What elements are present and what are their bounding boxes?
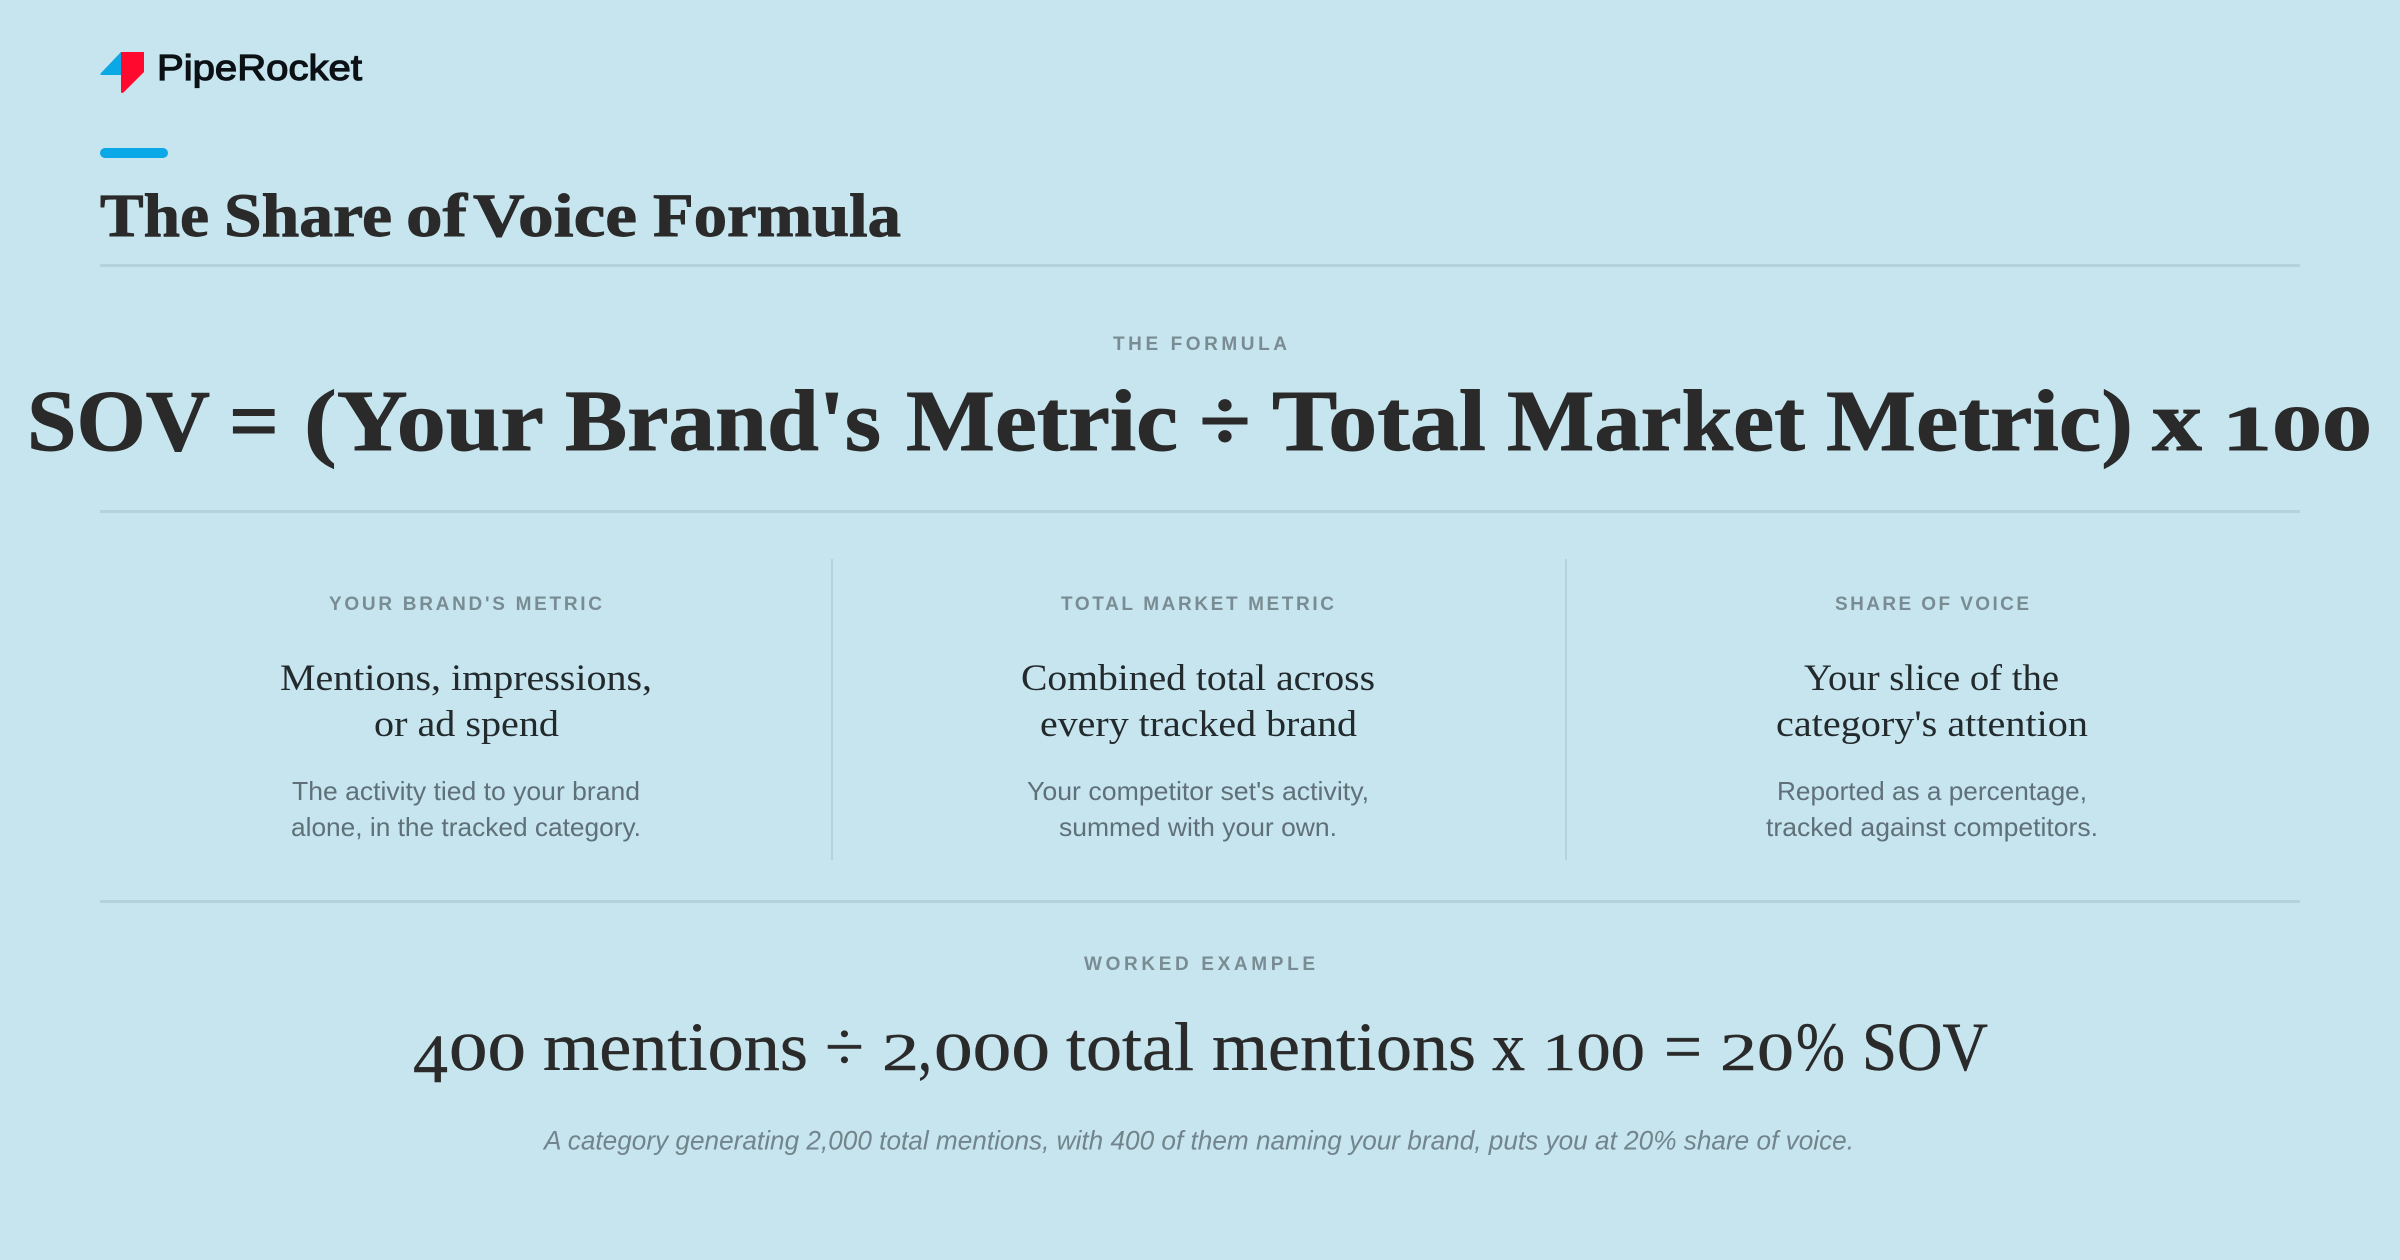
column description <box>1766 776 2098 842</box>
column heading <box>1776 658 2088 745</box>
column description: alone, in the tracked category. <box>291 812 641 842</box>
title: of <box>406 183 468 250</box>
formula label: THE FORMULA <box>1113 334 1287 355</box>
title: Share <box>224 183 392 250</box>
panel: worked example <box>413 954 1988 1156</box>
column label: YOUR BRAND'S METRIC <box>329 594 602 615</box>
worked example equation: SOV <box>1862 1009 1988 1085</box>
title: Formula <box>653 183 901 250</box>
worked example equation: , <box>918 1009 932 1085</box>
worked example equation: 000 <box>934 1024 1050 1082</box>
column description: tracked against competitors. <box>1766 812 2098 842</box>
column label: SHARE OF VOICE <box>1835 594 2029 615</box>
column heading: or ad spend <box>374 704 560 745</box>
logo: PipeRocket <box>100 47 362 93</box>
worked example equation <box>413 1009 1988 1097</box>
formula equation: SOV <box>27 372 210 469</box>
column heading: every tracked brand <box>1040 704 1358 745</box>
worked example label: WORKED EXAMPLE <box>1084 954 1315 975</box>
formula equation: x <box>2152 372 2203 469</box>
column heading <box>280 658 652 745</box>
column label: TOTAL MARKET METRIC <box>1061 594 1334 615</box>
formula equation: ÷ <box>1199 372 1251 469</box>
logo wordmark: PipeRocket <box>157 47 362 88</box>
panel: total market metric <box>1021 594 1375 842</box>
panel: the formula <box>27 334 2372 469</box>
panel: your brand's metric <box>280 594 652 842</box>
worked example equation: 20 <box>1720 1024 1794 1082</box>
column description: Reported as a percentage, <box>1777 776 2087 806</box>
worked example equation: % <box>1796 1009 1845 1085</box>
worked example equation: x <box>1492 1009 1525 1085</box>
formula equation: Market <box>1507 372 1805 469</box>
column heading: Combined total across <box>1021 658 1375 699</box>
column heading <box>1021 658 1375 745</box>
column heading: Your slice of the <box>1804 658 2059 699</box>
worked example equation: mentions <box>1212 1009 1476 1085</box>
worked example equation: 4 <box>413 1021 448 1097</box>
icon: logo mark <box>100 52 144 93</box>
title: The <box>100 183 209 250</box>
formula equation: Total <box>1272 372 1486 469</box>
formula equation: Metric) <box>1826 372 2133 469</box>
formula equation: Metric <box>906 372 1178 469</box>
worked example note: A category generating 2,000 total mentions, with 400 of them naming your brand, puts you at 20% share of voice. <box>542 1126 1854 1156</box>
worked example equation: ÷ <box>825 1009 864 1085</box>
column description <box>291 776 641 842</box>
worked example equation: 00 <box>449 1024 526 1082</box>
column description <box>1027 776 1369 842</box>
formula equation: Brand's <box>565 372 881 469</box>
worked example equation: = <box>1664 1009 1702 1085</box>
worked example equation: total <box>1066 1009 1194 1085</box>
panel: share of voice <box>1766 594 2098 842</box>
column description: The activity tied to your brand <box>292 776 640 806</box>
formula equation: (Your <box>304 372 544 469</box>
formula equation <box>27 372 2372 469</box>
title <box>100 183 901 250</box>
title: Voice <box>473 183 637 250</box>
formula equation: = <box>229 372 279 469</box>
column heading: category's attention <box>1776 704 2088 745</box>
column heading: Mentions, impressions, <box>280 658 652 699</box>
column description: Your competitor set's activity, <box>1027 776 1369 806</box>
worked example equation: 100 <box>1542 1024 1645 1082</box>
column description: summed with your own. <box>1059 812 1337 842</box>
accent bar <box>100 148 168 158</box>
worked example equation: mentions <box>543 1009 808 1085</box>
worked example equation: 2 <box>882 1024 919 1082</box>
formula equation: 100 <box>2222 393 2372 464</box>
